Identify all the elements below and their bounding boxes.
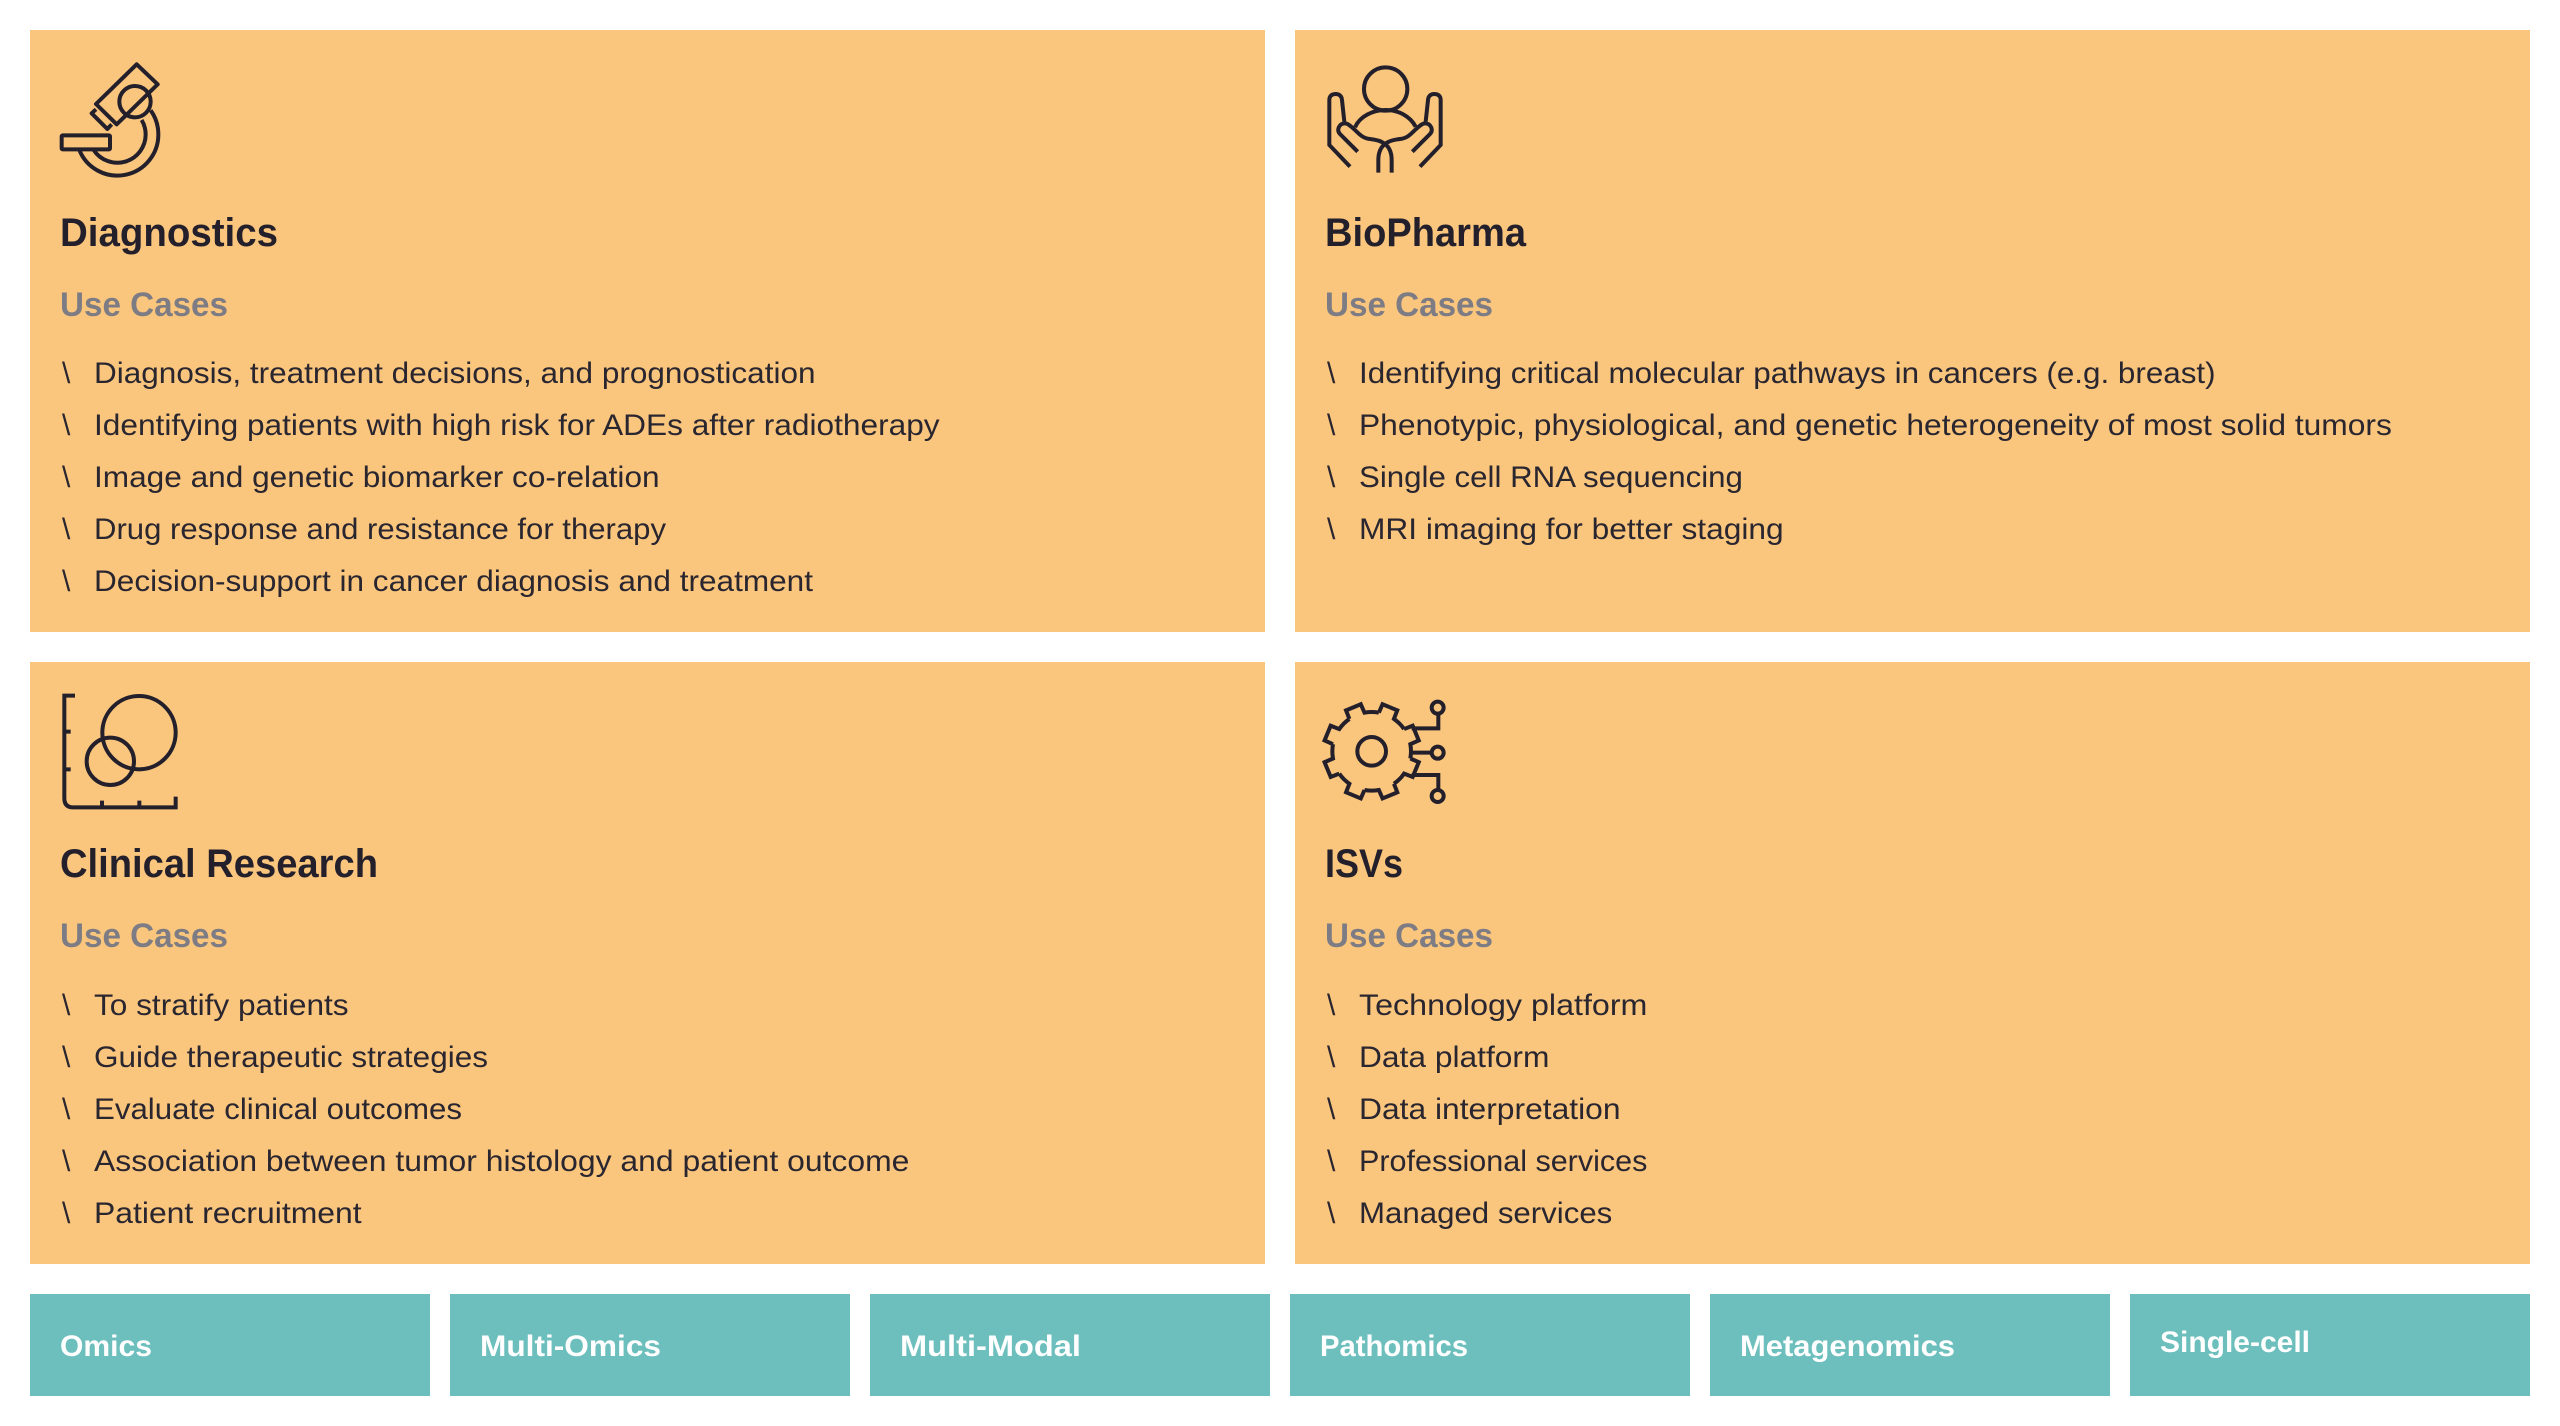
list: Clinical Research use cases: Evaluate clinical outcomes bbox=[94, 1093, 462, 1126]
list: ISVs use cases: \ bbox=[1327, 1041, 1336, 1074]
list: ISVs use cases: \ bbox=[1327, 1197, 1336, 1230]
list: ISVs use cases: Managed services bbox=[1359, 1197, 1612, 1230]
panel: BioPharma bbox=[1295, 30, 2530, 632]
heading: BioPharma: BioPharma bbox=[1325, 211, 1527, 255]
list: Clinical Research use cases: Guide therapeutic strategies bbox=[94, 1041, 488, 1074]
heading: Clinical Research: Clinical Research bbox=[60, 842, 378, 886]
tag: Pathomics bbox=[1290, 1294, 1690, 1396]
list: Diagnostics use cases: Identifying patients with high risk for ADEs after radiotherapy bbox=[94, 409, 940, 442]
icon: gear with network nodes bbox=[1315, 695, 1444, 808]
list: Clinical Research use cases bbox=[62, 989, 909, 1230]
list: Clinical Research use cases: Patient recruitment bbox=[94, 1197, 362, 1230]
list: Diagnostics use cases: Drug response and resistance for therapy bbox=[94, 513, 666, 546]
list: Clinical Research use cases: \ bbox=[62, 1093, 71, 1126]
list: Diagnostics use cases: \ bbox=[62, 357, 71, 390]
list: ISVs use cases: \ bbox=[1327, 1145, 1336, 1178]
list: BioPharma use cases: Phenotypic, physiological, and genetic heterogeneity of most solid tumors bbox=[1359, 409, 2392, 442]
panel: ISVs bbox=[1295, 662, 2530, 1264]
tag: Metagenomics bbox=[1710, 1294, 2110, 1396]
list: Clinical Research use cases: \ bbox=[62, 1145, 71, 1178]
list: Diagnostics use cases: Decision-support in cancer diagnosis and treatment bbox=[94, 565, 814, 598]
icon: hands holding person bbox=[1329, 67, 1441, 173]
subheading: Use Cases: Use Cases bbox=[60, 286, 228, 324]
tag: Omics bbox=[30, 1294, 430, 1396]
heading: ISVs: ISVs bbox=[1325, 842, 1403, 886]
list: Clinical Research use cases: \ bbox=[62, 1041, 71, 1074]
subheading: Use Cases: Use Cases bbox=[60, 917, 228, 955]
list: Clinical Research use cases: Association between tumor histology and patient outcome bbox=[94, 1145, 909, 1178]
list: BioPharma use cases bbox=[1327, 357, 2392, 546]
list: ISVs use cases: \ bbox=[1327, 989, 1336, 1022]
list: BioPharma use cases: Single cell RNA sequencing bbox=[1359, 461, 1743, 494]
tag: Single-cell: Single-cell bbox=[2160, 1326, 2310, 1359]
list: BioPharma use cases: \ bbox=[1327, 461, 1336, 494]
list: ISVs use cases bbox=[1327, 989, 1647, 1230]
tag: Metagenomics: Metagenomics bbox=[1740, 1330, 1955, 1363]
subheading: Use Cases: Use Cases bbox=[1325, 286, 1493, 324]
list: BioPharma use cases: \ bbox=[1327, 357, 1336, 390]
list: ISVs use cases: \ bbox=[1327, 1093, 1336, 1126]
list: Diagnostics use cases: Diagnosis, treatment decisions, and prognostication bbox=[94, 357, 816, 390]
tag: Multi-Omics: Multi-Omics bbox=[480, 1330, 661, 1363]
list: Clinical Research use cases: To stratify patients bbox=[94, 989, 349, 1022]
list: ISVs use cases: Data interpretation bbox=[1359, 1093, 1620, 1126]
tag: Single-cell bbox=[2130, 1294, 2530, 1396]
subheading: Use Cases: Use Cases bbox=[1325, 917, 1493, 955]
list: Diagnostics use cases: \ bbox=[62, 565, 71, 598]
list: BioPharma use cases: Identifying critical molecular pathways in cancers (e.g. breast) bbox=[1359, 357, 2216, 390]
tag: Multi-Modal bbox=[870, 1294, 1270, 1396]
tag: Pathomics: Pathomics bbox=[1320, 1330, 1468, 1363]
list: BioPharma use cases: MRI imaging for better staging bbox=[1359, 513, 1784, 546]
icon: microscope bbox=[62, 64, 158, 176]
list: Diagnostics use cases: Image and genetic biomarker co-relation bbox=[94, 461, 660, 494]
list: ISVs use cases: Technology platform bbox=[1359, 989, 1647, 1022]
tag: Multi-Omics bbox=[450, 1294, 850, 1396]
panel: Clinical Research bbox=[30, 662, 1265, 1264]
list: Clinical Research use cases: \ bbox=[62, 1197, 71, 1230]
list: ISVs use cases: Data platform bbox=[1359, 1041, 1549, 1074]
list: Clinical Research use cases: \ bbox=[62, 989, 71, 1022]
tag: Multi-Modal: Multi-Modal bbox=[900, 1330, 1081, 1363]
list: Diagnostics use cases bbox=[62, 357, 940, 598]
panel: Diagnostics bbox=[30, 30, 1265, 632]
list: BioPharma use cases: \ bbox=[1327, 513, 1336, 546]
heading: Diagnostics: Diagnostics bbox=[60, 211, 278, 255]
list: Diagnostics use cases: \ bbox=[62, 409, 71, 442]
tag: Omics: Omics bbox=[60, 1330, 152, 1363]
list: BioPharma use cases: \ bbox=[1327, 409, 1336, 442]
icon: chart with overlapping circles bbox=[64, 696, 176, 807]
list: Diagnostics use cases: \ bbox=[62, 513, 71, 546]
list: ISVs use cases: Professional services bbox=[1359, 1145, 1647, 1178]
list: Diagnostics use cases: \ bbox=[62, 461, 71, 494]
